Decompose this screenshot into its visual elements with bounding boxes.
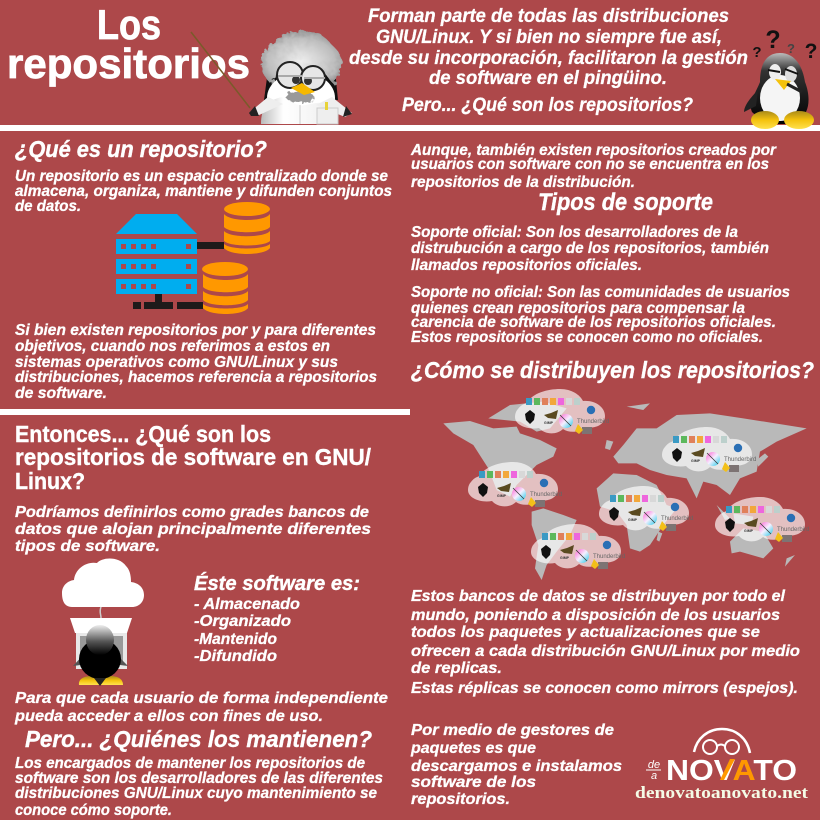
icon: server and databases <box>116 202 270 314</box>
package managers text: descargamos e instalamos <box>411 758 622 775</box>
unofficial support: Soporte no oficial: Son las comunidades de usuarios <box>411 284 790 301</box>
unofficial support <box>411 284 790 346</box>
logo: de a novato: denovatoanovato.net <box>635 783 808 802</box>
distribution text: mundo, poniendo a disposición de los usuarios <box>411 607 780 624</box>
paragraph <box>15 322 377 402</box>
heading <box>15 421 372 494</box>
maintainers text: conoce cómo soporte. <box>15 802 172 819</box>
icon: cloud and penguin at laptop <box>62 558 144 686</box>
cloud: oceania: GIMP <box>744 529 754 533</box>
intro text: desde su incorporación, facilitaron la gestión <box>349 48 748 69</box>
cloud: africa <box>599 486 693 531</box>
official support: llamados repositorios oficiales. <box>411 257 642 274</box>
logo: de a novato: NOVATO <box>666 755 797 787</box>
panel: distribution <box>410 357 814 808</box>
cloud: south america: Thunderbird <box>593 554 625 560</box>
distribution text <box>411 588 800 697</box>
cloud: oceania <box>715 497 809 542</box>
intro text: Aunque, también existen repositorios creados por <box>410 142 777 159</box>
title: Los <box>97 1 161 48</box>
paragraph: Si bien existen repositorios por y para diferentes <box>15 322 376 339</box>
maintainers text: Los encargados de mantener los repositorios de <box>15 755 365 772</box>
intro text <box>349 6 748 116</box>
cloud: asia <box>662 427 756 472</box>
illustration: thinking penguin: ? <box>765 26 781 54</box>
illustration: thinking penguin: ? <box>752 44 762 61</box>
panel: what is a repository <box>15 136 392 402</box>
divider bars <box>0 125 820 415</box>
intro text: usuarios con software con no se encuentra en los <box>411 156 769 173</box>
definition text <box>15 168 392 215</box>
distribution text: todos los paquetes y actualizaciones que se <box>411 624 760 641</box>
package managers text <box>410 722 622 808</box>
cloud: africa: GIMP <box>628 518 638 522</box>
title: repositorios <box>7 40 250 87</box>
distribution text: Estas réplicas se conocen como mirrors (espejos). <box>411 680 798 697</box>
official support <box>411 224 769 274</box>
cloud: south america <box>531 524 625 569</box>
purpose text: Para que cada usuario de forma independiente <box>15 690 388 707</box>
intro text: Forman parte de todas las distribuciones <box>368 6 729 27</box>
logo: de a novato <box>635 729 808 802</box>
cloud: north <box>515 389 609 434</box>
definition text: datos que alojan principalmente diferentes <box>15 521 371 538</box>
heading: Linux? <box>15 468 85 494</box>
cloud: america: Thunderbird <box>530 492 562 498</box>
cloud: north: Thunderbird <box>577 419 609 425</box>
cloud: north: GIMP <box>544 421 554 425</box>
maintainers text <box>15 755 383 819</box>
paragraph: distribuciones, hacemos referencia a repositorios <box>15 369 377 386</box>
cloud: america: GIMP <box>497 494 507 498</box>
purpose text: pueda acceder a ellos con fines de uso. <box>14 708 323 725</box>
logo: de a novato: de <box>648 759 660 771</box>
heading: Tipos de soporte <box>538 189 713 216</box>
intro text: GNU/Linux. Y si bien no siempre fue así, <box>376 27 722 48</box>
definition text: de datos. <box>15 198 81 215</box>
definition text: Podríamos definirlos como grades bancos de <box>15 504 369 521</box>
heading: ¿Qué es un repositorio? <box>15 136 267 162</box>
intro text <box>410 142 777 191</box>
illustration: thinking penguin <box>744 26 817 129</box>
heading: who maintains: Pero... ¿Quiénes los mantienen? <box>25 726 372 752</box>
maintainers text: software son los desarrolladores de las diferentes <box>15 770 383 787</box>
illustration: thinking penguin: ? <box>787 41 795 56</box>
intro text: repositorios de la distribución. <box>411 174 635 191</box>
panel: support types <box>410 142 790 346</box>
unofficial support: quienes crean repositorios para compensar la <box>411 300 745 317</box>
cloud: oceania: Thunderbird <box>777 527 809 533</box>
package managers text: Por medio de gestores de <box>411 722 614 739</box>
definition text: Un repositorio es un espacio centralizado donde se <box>15 168 388 185</box>
official support: distrubución a cargo de los repositorios, también <box>411 240 769 257</box>
illustration: scientist penguin with pointer <box>191 31 352 124</box>
distribution text: ofrecen a cada distribución GNU/Linux por medio <box>411 643 800 660</box>
package managers text: repositorios. <box>411 791 510 808</box>
paragraph: sistemas operativos como GNU/Linux y sus <box>15 354 338 371</box>
list: software is: -Mantenido <box>194 631 277 648</box>
distribution text: Estos bancos de datos se distribuyen por todo el <box>411 588 786 605</box>
title <box>7 1 250 87</box>
unofficial support: carencia de software de los repositorios oficiales. <box>411 314 776 331</box>
maintainers text: distribuciones GNU/Linux cuyo mantenimiento se <box>15 785 377 802</box>
package managers text: paquetes es que <box>410 740 536 757</box>
distribution text: de replicas. <box>411 660 502 677</box>
logo: de a novato: a <box>651 770 657 782</box>
heading: repositorios de software en GNU/ <box>15 444 372 470</box>
paragraph: objetivos, cuando nos referimos a estos en <box>15 338 330 355</box>
world map with clouds <box>443 389 809 580</box>
continents <box>443 402 807 580</box>
cloud: asia: Thunderbird <box>724 457 756 463</box>
cloud: africa: Thunderbird <box>661 516 693 522</box>
definition text: almacena, organiza, mantiene y difunden conjuntos <box>15 183 392 200</box>
panel: software repositories <box>14 421 388 819</box>
list: software is <box>194 572 360 665</box>
purpose text <box>14 690 388 725</box>
intro text: de software en el pingüino. <box>429 68 667 89</box>
cloud: south america: GIMP <box>560 556 570 560</box>
list: software is: - Almacenado <box>194 596 300 613</box>
cloud: america <box>468 462 562 507</box>
intro text: Pero... ¿Qué son los repositorios? <box>402 95 693 116</box>
list: software is: -Difundido <box>194 648 277 665</box>
paragraph: de software. <box>15 385 107 402</box>
package managers text: software de los <box>411 774 536 791</box>
definition text <box>15 504 371 555</box>
unofficial support: Estos repositorios se conocen como no oficiales. <box>411 329 763 346</box>
illustration: thinking penguin: ? <box>805 40 817 63</box>
list: software is: Éste software es: <box>194 572 360 595</box>
heading: Entonces... ¿Qué son los <box>15 421 271 447</box>
definition text: tipos de software. <box>15 538 160 555</box>
official support: Soporte oficial: Son los desarrolladores de la <box>411 224 738 241</box>
cloud: asia: GIMP <box>691 459 701 463</box>
list: software is: -Organizado <box>194 613 291 630</box>
